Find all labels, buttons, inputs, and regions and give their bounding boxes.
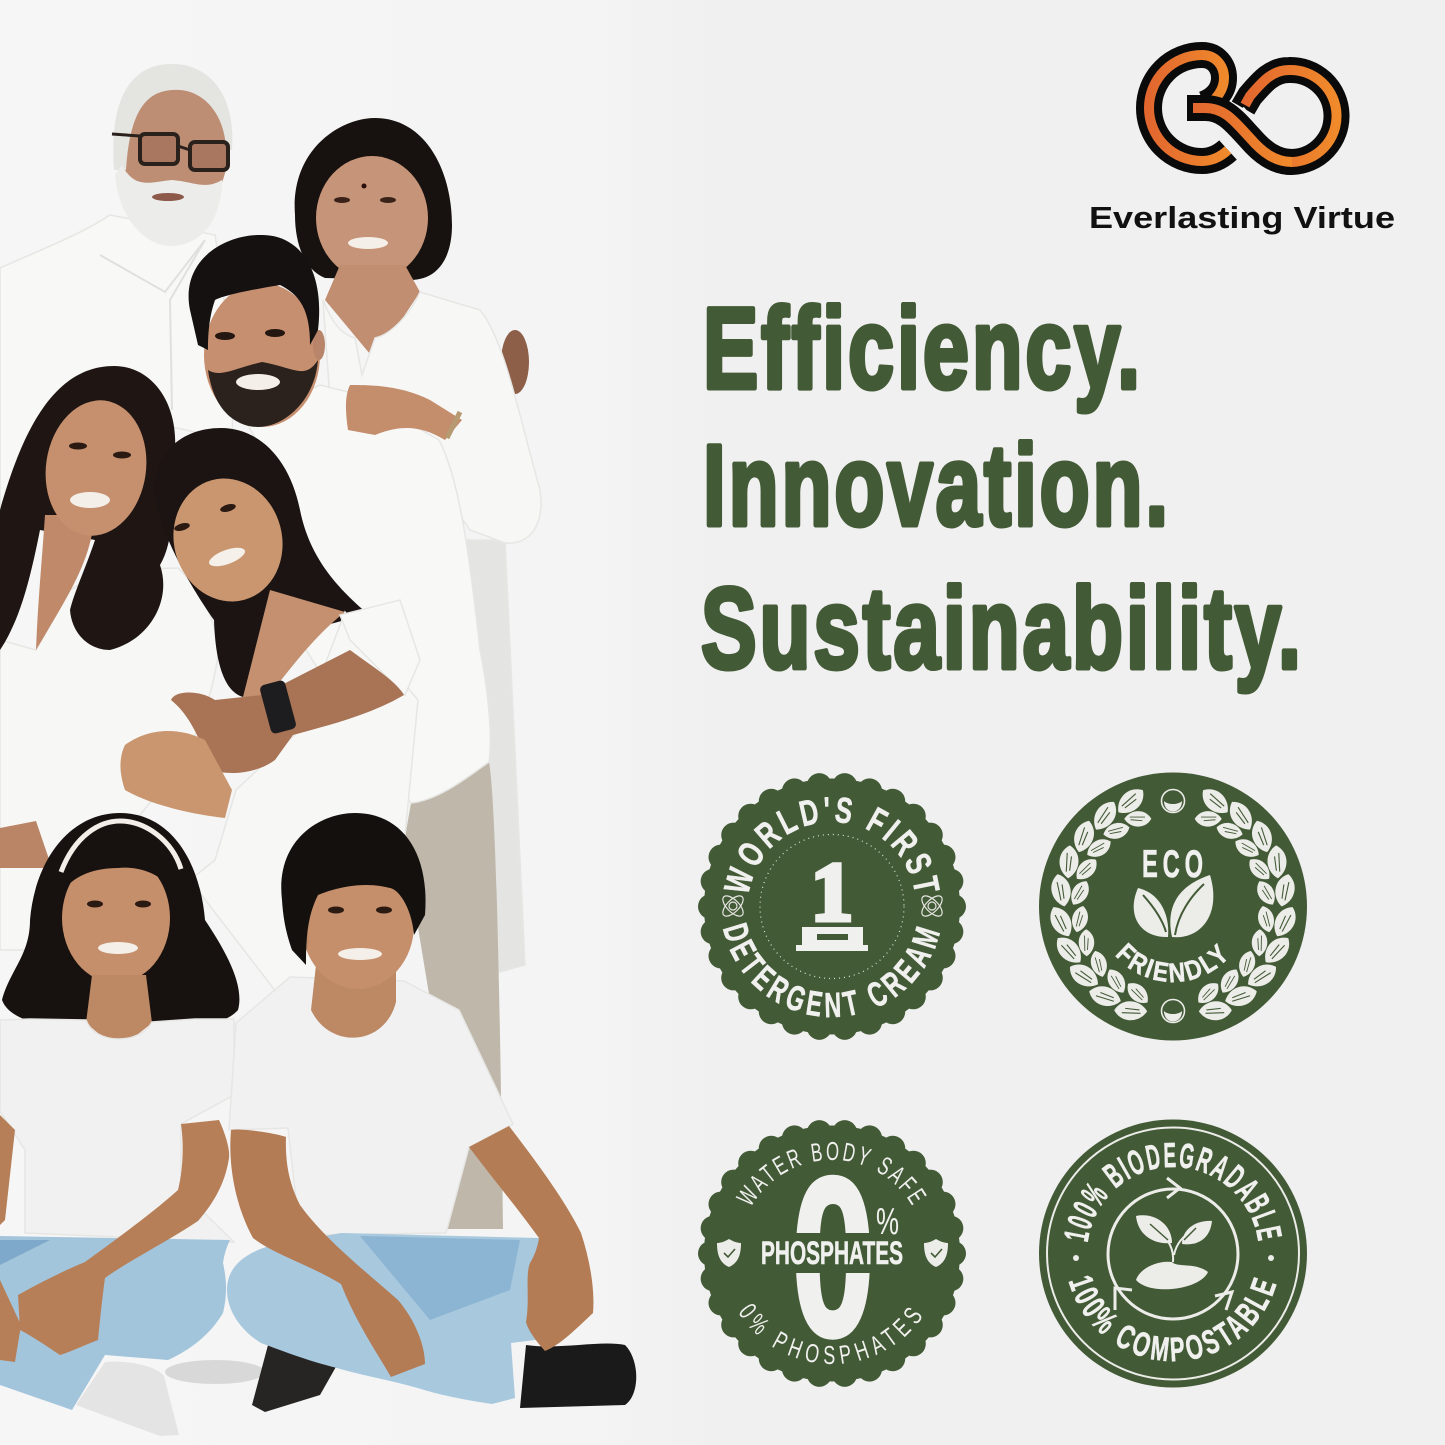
heading line: Efficiency: Efficiency. [703,285,1143,413]
girl [0,813,239,1436]
family photo illustration [0,64,636,1436]
heading [701,285,1304,693]
icon: atom left [720,893,746,919]
logo: Everlasting Virtue [1089,55,1395,235]
badge: world's first detergent cream [698,773,966,1040]
grandfather [0,64,233,520]
badge: eco friendly [1039,772,1307,1040]
icon: top circle [1162,790,1184,812]
clasped hands and watch [120,650,404,818]
badge: biodegradable compostable [1039,1120,1307,1388]
heading line: Innovation: Innovation. [703,422,1171,550]
boy [165,813,636,1412]
text: eco: ECO [1142,843,1208,886]
logo mark: infinity knot [1149,55,1337,162]
text: 100% biodegradable: 100% BIODEGRADABLE [1064,1142,1282,1242]
text: friendly: FRIENDLY [1115,942,1226,983]
badge: 0% phosphates [698,1120,966,1387]
text: 0% phosphates: 0% PHOSPHATES [740,1304,922,1364]
text: 100% compostable: 100% COMPOSTABLE [1068,1276,1277,1362]
text: phosphates: PHOSPHATES [761,1235,903,1271]
text: percent sign: % [876,1201,899,1243]
logo wordmark: Everlasting Virtue [1089,200,1395,235]
icon: number one trophy: 1 [811,846,853,939]
icon: leaves [1134,875,1213,937]
laurel wreath left [1045,783,1153,1021]
icon: number one trophy [796,846,868,951]
icon: shield right [924,1239,948,1267]
grandmother [295,118,541,972]
laurel wreath right [1193,783,1301,1021]
icon: sprout [1136,1215,1212,1289]
big zero: 0 [792,1131,874,1383]
icon: atom right [919,893,945,919]
icon: bottom circle [1162,1000,1184,1022]
father [189,235,503,1229]
icon: recycling ring [1108,1178,1238,1319]
mother [0,366,218,950]
daughter-in-law [154,428,420,1010]
badge text: detergent cream: DETERGENT CREAM [722,922,940,1018]
badge text: world's first: WORLD'S FIRST [723,797,940,892]
text: water body safe: WATER BODY SAFE [736,1142,927,1206]
icon: shield left [717,1239,741,1267]
